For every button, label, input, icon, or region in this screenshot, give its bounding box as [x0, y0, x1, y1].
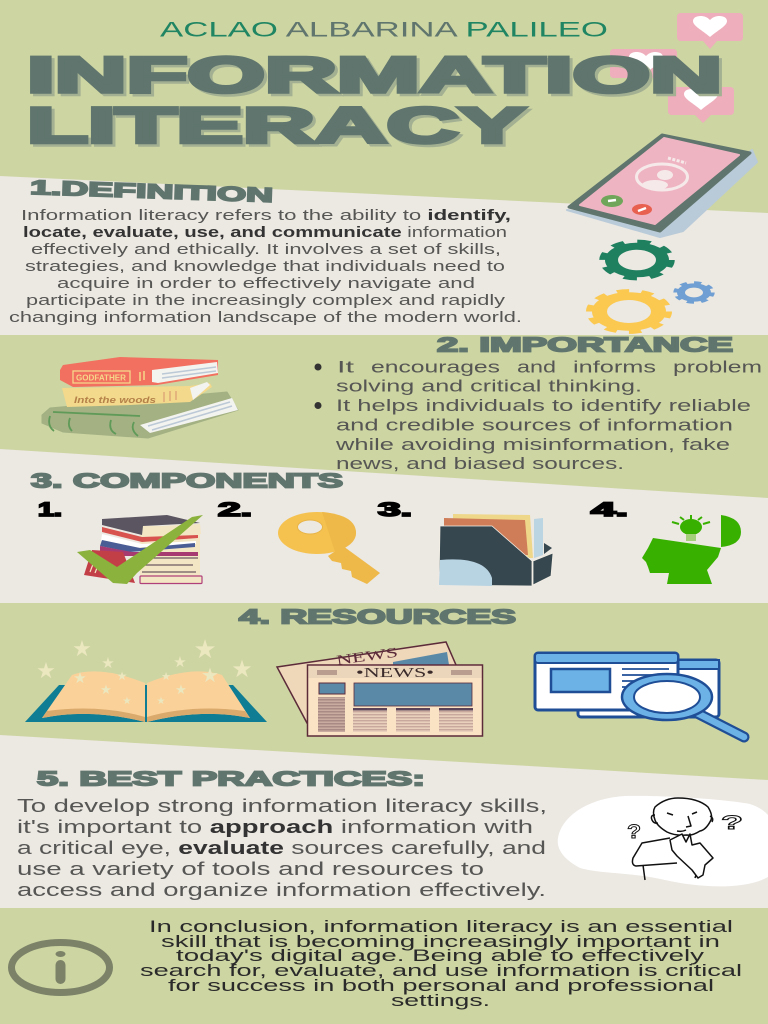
icon: key [278, 512, 380, 584]
title [27, 47, 725, 156]
text: definition body: locate, evaluate, use, and communicate information [23, 225, 507, 241]
heading: importance: 2. IMPORTANCE [437, 334, 733, 356]
list: importance bullets [314, 358, 762, 473]
panel: best practices background [0, 735, 768, 908]
icon: open book with stars: ★ [157, 696, 166, 707]
text: conclusion [140, 917, 742, 1010]
icon: open book with stars: ★ [72, 636, 92, 661]
icon: newspapers: NEWS [335, 645, 399, 669]
text: conclusion: In conclusion, information literacy is an essential [149, 917, 733, 936]
text: definition body: participate in the increasingly complex and rapidly [26, 293, 506, 309]
text: conclusion: search for, evaluate, and use information is critical [140, 961, 742, 980]
text: best practices body: it's important to approach information with [17, 817, 533, 837]
panel: components background [0, 449, 768, 603]
title: INFORMATION [27, 47, 722, 103]
icon: question marks [627, 813, 743, 843]
text: definition body [9, 208, 522, 326]
icon: file holder [439, 514, 553, 586]
list: importance bullets: solving and critical thinking. [336, 376, 642, 396]
icon: white blob [558, 796, 768, 886]
list: importance bullets: and [517, 358, 556, 376]
numbers: components [38, 500, 628, 521]
icon: stack of books: Into the woods [74, 395, 156, 405]
author names: ACLAO ALBARINA PALILEO [160, 18, 608, 42]
icon: stack of books: GODFATHER [76, 374, 126, 382]
icon: open book with stars [25, 634, 267, 722]
text: best practices body: use a variety of tools and resources to [17, 859, 484, 879]
icon: info circle [12, 942, 110, 992]
title: LITERACY [30, 100, 528, 156]
icon: open book with stars: ★ [123, 696, 132, 707]
panel: definition background [0, 176, 768, 335]
list: importance bullets: It [337, 358, 354, 376]
icon: pink heart bubbles [610, 13, 743, 123]
text: conclusion: for success in both personal and professional [168, 976, 714, 995]
icon: browser windows with magnifier [535, 653, 744, 737]
text: definition body: effectively and ethically. It involves a set of skills, [31, 242, 501, 258]
icon: books with check mark [77, 515, 203, 584]
list: importance bullets: while avoiding misinformation, fake [335, 435, 730, 454]
list: importance bullets: and credible sources of information [336, 416, 733, 434]
icon: blue gear [676, 283, 712, 302]
heading: definition: 1.DEFINITION [30, 177, 273, 207]
text: definition body: changing information landscape of the modern world. [9, 310, 522, 326]
icon: open book with stars: ★ [117, 669, 127, 683]
text: conclusion: skill that is becoming increasingly important in [161, 932, 720, 951]
icon: yellow gear [590, 291, 668, 332]
list: importance bullets: problem [673, 358, 762, 376]
text: best practices body [17, 796, 547, 900]
text: definition body: strategies, and knowledge that individuals need to [25, 259, 505, 275]
text: conclusion: settings. [391, 991, 490, 1010]
icon: open book with stars: ★ [100, 682, 112, 697]
list: importance bullets: It helps individuals to identify reliable [336, 396, 751, 415]
list: importance bullets: informs [573, 358, 656, 376]
icon: open book with stars: ★ [175, 682, 187, 697]
icon: smartphone [567, 135, 757, 237]
icon: newspapers: •NEWS• [356, 666, 434, 681]
text: best practices body: To develop strong information literacy skills, [17, 796, 547, 816]
icon: newspapers [277, 642, 482, 736]
icon: open book with stars: ★ [36, 658, 56, 683]
icon: open book with stars: ★ [173, 654, 187, 671]
icon: open book with stars: ★ [193, 634, 217, 664]
icon: open book with stars: ★ [231, 656, 253, 683]
text: conclusion: today's digital age. Being able to effectively [176, 946, 705, 965]
icon: open book with stars: ★ [73, 670, 87, 687]
panel: conclusion background [0, 908, 768, 1024]
icon: open book with stars: ★ [161, 671, 171, 683]
icon: thinking man [632, 798, 713, 880]
icon: green gear [602, 241, 672, 279]
text: best practices body: a critical eye, evaluate sources carefully, and [17, 838, 546, 858]
icon: question marks: ? [721, 813, 743, 834]
numbers: components: 4. [591, 500, 628, 521]
title: INFORMATION [30, 50, 725, 106]
title: LITERACY [27, 98, 525, 154]
text: definition body: Information literacy refers to the ability to identify, [21, 208, 511, 224]
list: importance bullets: news, and biased sources. [336, 454, 624, 473]
text: best practices body: access and organize information effectively. [17, 880, 546, 900]
heading: components: 3. COMPONENTS [31, 470, 343, 492]
list: importance bullets: encourages [371, 358, 500, 376]
icon: question marks: ? [627, 822, 641, 843]
heading: best practices: 5. BEST PRACTICES: [37, 768, 425, 790]
icon: stack of books [42, 357, 238, 438]
text: definition body: acquire in order to effectively navigate and [57, 276, 475, 292]
numbers: components: 2. [218, 500, 252, 521]
numbers: components: 1. [38, 500, 62, 521]
heading: resources: 4. RESOURCES [239, 606, 516, 628]
icon: open book with stars: ★ [101, 655, 115, 672]
icon: head with light bulb [642, 515, 741, 584]
icon: open book with stars: ★ [201, 665, 219, 687]
numbers: components: 3. [378, 500, 412, 521]
